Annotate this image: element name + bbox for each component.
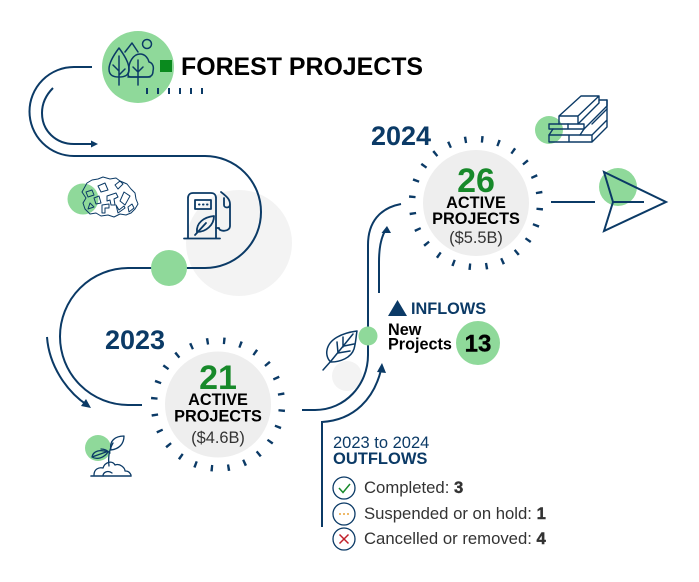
small ticks under title (147, 88, 202, 94)
icon: lumber stack (535, 96, 607, 144)
suspended row: Suspended or on hold: 1 (364, 504, 546, 523)
icon: sprout (85, 435, 131, 476)
node: 2023 active projects (149, 336, 287, 473)
inflows block: 13 (465, 330, 491, 358)
completed row (333, 477, 463, 499)
bullet square (160, 60, 172, 72)
decorative gray circle behind fuel pump (186, 190, 292, 296)
outflow bracket arrow (322, 363, 386, 527)
title icon circle (102, 31, 174, 103)
title text: FOREST PROJECTS (181, 53, 423, 81)
icon: leaf (323, 326, 378, 370)
node: 2023 active projects: ACTIVE (188, 391, 248, 409)
node: 2024 active projects: ($5.5B) (449, 229, 503, 247)
new projects label: New (388, 321, 422, 339)
2023 year label: 2023 (105, 325, 165, 355)
icon: trees and mountain (109, 40, 153, 85)
completed row: Completed: 3 (364, 478, 463, 497)
node: 2023 active projects: 21 (199, 359, 237, 397)
icon: biofuel pump (184, 192, 230, 238)
outflows block (333, 434, 547, 550)
outflows heading: OUTFLOWS (333, 450, 427, 468)
arrow: curve toward 2023 sprout (47, 337, 91, 408)
title group (102, 31, 423, 103)
icon: paper plane arrow (599, 168, 666, 231)
node: 2023 active projects: ($4.6B) (191, 429, 245, 447)
green node on path (151, 250, 187, 286)
arrow: top curve (42, 88, 98, 148)
icon: biomass wood chips (68, 177, 138, 217)
outgoing line (551, 201, 595, 203)
new projects count (456, 321, 500, 365)
2024 year label: 2024 (371, 121, 431, 151)
decorative gray circle behind leaf (332, 361, 362, 391)
node: 2024 active projects: ACTIVE (446, 194, 506, 212)
inflows heading: INFLOWS (411, 300, 486, 318)
node: 2023 active projects: PROJECTS (174, 408, 262, 426)
outflows period: 2023 to 2024 (333, 434, 429, 452)
node: 2024 active projects: PROJECTS (432, 210, 520, 228)
tick ring 2023 (149, 336, 287, 473)
main winding path to 2023 (29, 67, 261, 405)
node: 2024 active projects (407, 134, 545, 272)
node: 2024 active projects: 26 (457, 162, 495, 200)
triangle marker (388, 300, 407, 316)
inflows block (388, 300, 500, 365)
inflow arrow (379, 226, 391, 293)
path from 2023 to 2024 (302, 204, 401, 410)
cancelled row: Cancelled or removed: 4 (364, 529, 547, 548)
tick ring 2024 (407, 134, 545, 272)
inflows block: Projects (388, 336, 452, 354)
